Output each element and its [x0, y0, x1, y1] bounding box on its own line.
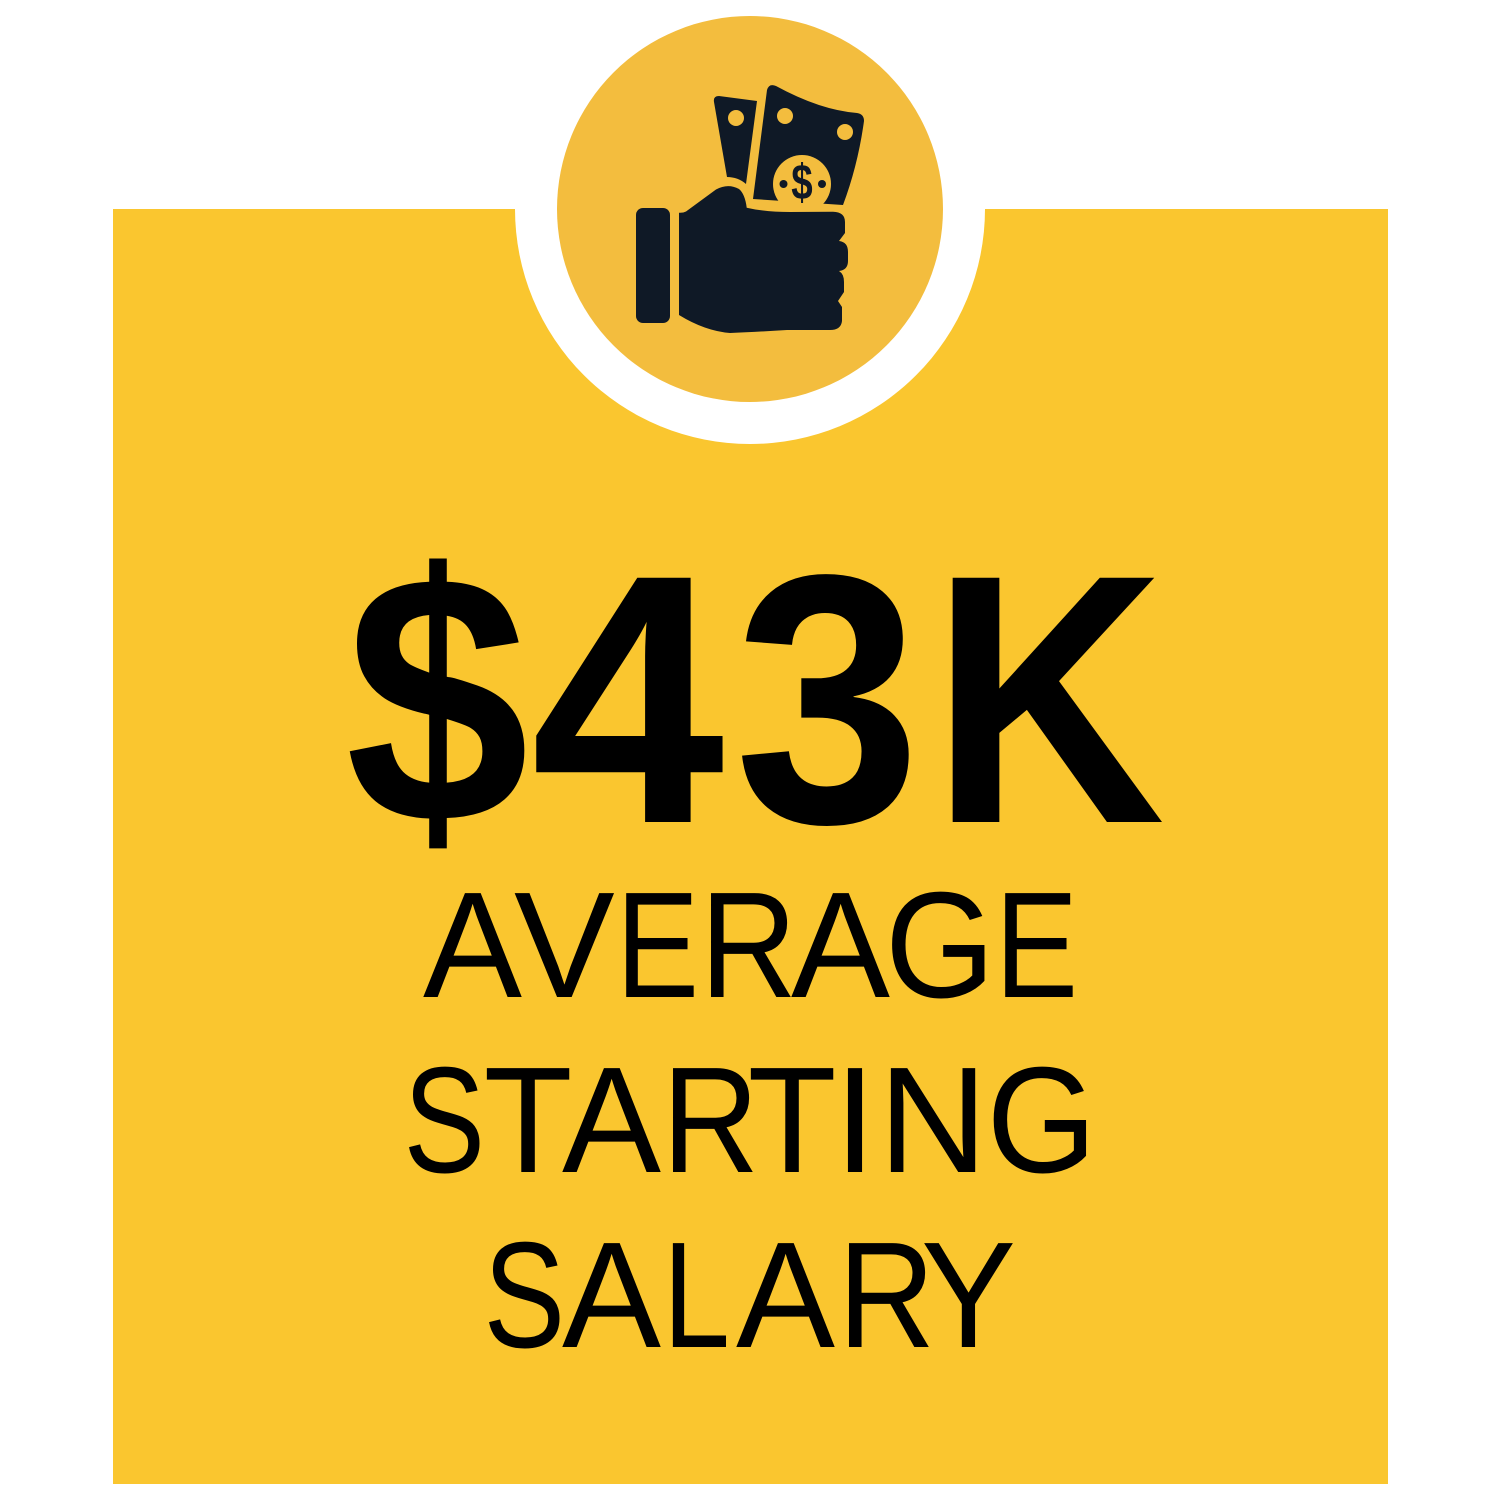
label: SALARY: S: [484, 1210, 565, 1379]
white circular cutout: [515, 0, 985, 444]
label: STARTING: R: [662, 1035, 759, 1204]
label: AVERAGE: A: [423, 860, 522, 1029]
hand fist: [679, 186, 848, 333]
label: STARTING: G: [987, 1035, 1097, 1204]
shirt cuff: [636, 208, 670, 323]
panel: yellow card: [113, 209, 1388, 1484]
label: STARTING: N: [878, 1035, 988, 1204]
headline: $43K: 3: [734, 502, 921, 898]
label: SALARY: L: [663, 1210, 730, 1379]
label: STARTING: A: [562, 1035, 661, 1204]
label: SALARY: Y: [921, 1210, 1016, 1379]
icon badge circle: [557, 16, 943, 402]
label: SALARY: R: [838, 1210, 935, 1379]
label: STARTING: I: [834, 1035, 876, 1204]
small banknote: [714, 96, 757, 184]
label: SALARY: A: [562, 1210, 661, 1379]
label: STARTING: T: [748, 1035, 837, 1204]
label: AVERAGE: V: [514, 860, 615, 1029]
label: STARTING: S: [404, 1035, 485, 1204]
headline: $43K: K: [931, 502, 1165, 898]
label: STARTING: T: [484, 1035, 573, 1204]
label: SALARY: A: [736, 1210, 835, 1379]
headline: $43K: $: [345, 502, 529, 898]
label: AVERAGE: R: [700, 860, 797, 1029]
label: AVERAGE: G: [885, 860, 995, 1029]
icon: hand holding money: [636, 85, 864, 333]
coin: $: [791, 154, 813, 210]
large banknote: [753, 85, 864, 205]
label: AVERAGE: A: [791, 860, 890, 1029]
headline: $43K: 4: [531, 502, 727, 898]
label: AVERAGE: E: [995, 860, 1078, 1029]
label: AVERAGE: E: [616, 860, 699, 1029]
coin: [773, 154, 831, 213]
